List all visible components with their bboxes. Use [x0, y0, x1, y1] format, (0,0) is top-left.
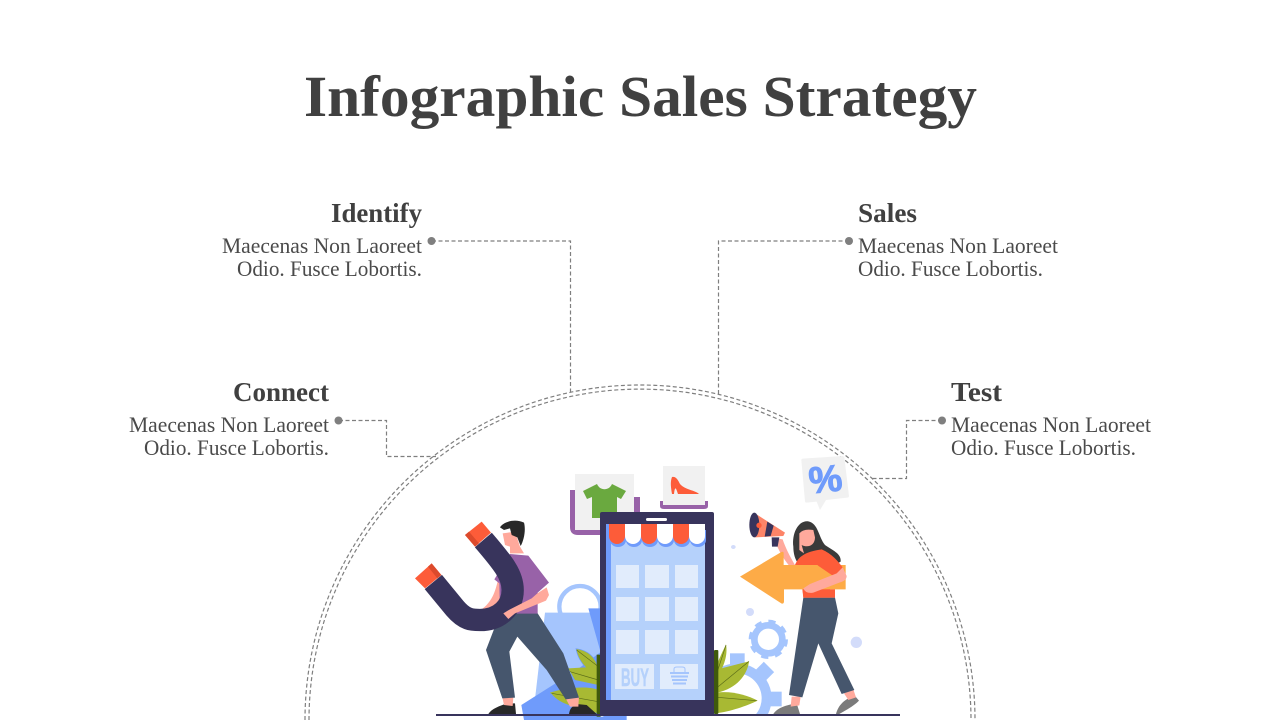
block: Connect: Connect: [233, 377, 329, 407]
icon: percent speech bubble: [801, 456, 849, 510]
icon: man with magnet: [415, 521, 597, 714]
connector: Identify: [428, 237, 570, 393]
icon: magnet: [415, 522, 513, 620]
icon: t-shirt product card: [570, 474, 640, 535]
icon: percent speech bubble: %: [807, 456, 844, 502]
icon: large gear: [702, 653, 782, 714]
illustration: left side, shopping bag and man with magnet: [415, 521, 627, 720]
block: Sales: Sales: [858, 198, 917, 228]
block: Sales: Maecenas Non Laoreet: [858, 233, 1058, 258]
title: Infographic Sales Strategy: [304, 64, 977, 129]
icon: right leaves: [714, 644, 758, 714]
block: Sales: Odio. Fusce Lobortis.: [858, 256, 1043, 281]
block: Identify: [222, 198, 422, 281]
connector: Connect: [334, 416, 436, 456]
block: Identify: Identify: [331, 198, 422, 228]
product grid: [616, 565, 698, 654]
decorative dots: [731, 545, 862, 648]
buy button: [615, 664, 654, 692]
block: Test: Test: [951, 377, 1002, 407]
icon: basket button: [660, 664, 698, 689]
icon: phone body: [600, 512, 714, 716]
block: Identify: Maecenas Non Laoreet: [222, 233, 422, 258]
block: Connect: Maecenas Non Laoreet: [129, 412, 329, 437]
phone screen: [606, 518, 705, 700]
block: Test: Maecenas Non Laoreet: [951, 412, 1151, 437]
buy button: BUY: [621, 664, 649, 692]
block: Sales: [858, 198, 1058, 281]
ground line: [436, 714, 900, 716]
awning: [608, 524, 706, 547]
connector: Test: [871, 416, 946, 478]
illustration: right side, small gear, leaves and woman: [714, 456, 862, 714]
connector: Sales: [718, 237, 853, 395]
block: Test: [951, 377, 1151, 460]
block: Connect: [129, 377, 329, 460]
block: Connect: Odio. Fusce Lobortis.: [144, 435, 329, 460]
block: Identify: Odio. Fusce Lobortis.: [237, 256, 422, 281]
illustration: phone storefront: [570, 466, 714, 716]
icon: left leaves: [550, 649, 601, 717]
icon: shopping bag: [521, 586, 627, 720]
icon: woman with arrow: [740, 521, 859, 714]
semicircle frame: [305, 385, 975, 720]
block: Test: Odio. Fusce Lobortis.: [951, 435, 1136, 460]
icon: shoe product card: [660, 466, 708, 509]
icon: small gear: [751, 622, 786, 657]
icon: megaphone: [749, 513, 785, 547]
